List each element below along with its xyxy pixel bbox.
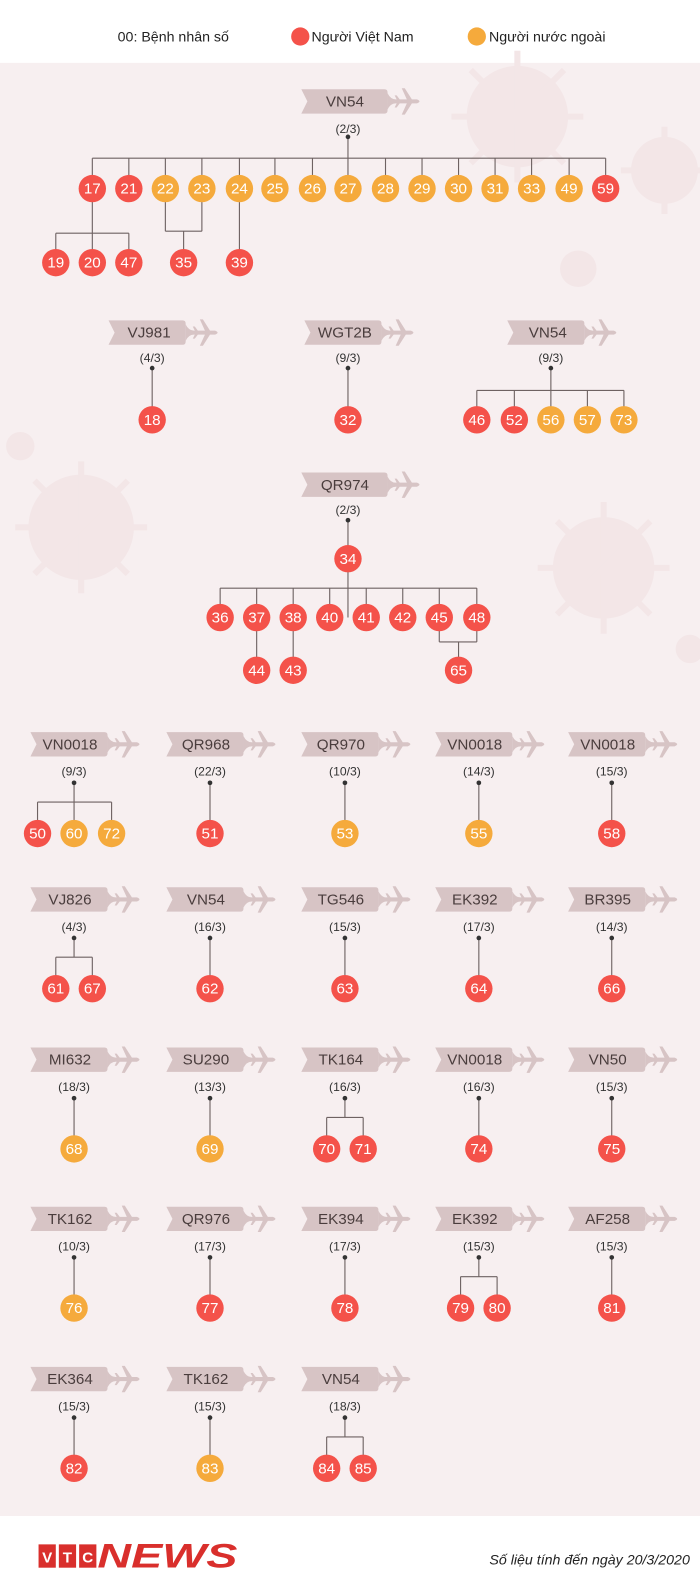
group: TK162 10/3: TK162 — [48, 1211, 92, 1228]
group: QR976 — [166, 1206, 275, 1322]
group: QR974: 38 — [285, 610, 302, 627]
group: VJ826: 67 — [84, 981, 101, 998]
logo: VTC NEWS: C — [82, 1550, 93, 1567]
group: VJ981: (4/3) — [140, 351, 165, 365]
group: SU290 — [166, 1046, 275, 1163]
group: VN0018 14/3: (14/3) — [463, 765, 495, 779]
patients: 19 — [47, 255, 64, 272]
header background — [0, 0, 700, 63]
group: VN0018 15/3: 58 — [603, 826, 620, 843]
group: EK392 17/3: 64 — [470, 981, 488, 998]
group: VN54 18/3: (18/3) — [329, 1400, 361, 1414]
connectors — [56, 137, 606, 263]
group: EK392 15/3: EK392 — [452, 1211, 498, 1228]
patients: 30 — [450, 181, 467, 198]
group: VN54 9/3: 52 — [506, 412, 523, 429]
group: VN54 9/3: 46 — [468, 412, 485, 429]
group: TK162 15/3 — [166, 1366, 275, 1482]
group: TK164: 70 — [318, 1141, 335, 1158]
group: VN54 2/3 — [42, 88, 619, 276]
group: MI632: MI632 — [49, 1052, 91, 1069]
patients: 47 — [120, 255, 137, 272]
group: TK162 10/3 — [30, 1206, 139, 1322]
group: MI632: 68 — [66, 1141, 83, 1158]
group: VN0018 14/3: VN0018 — [447, 736, 502, 753]
group: WGT2B: 32 — [340, 412, 356, 429]
group: EK392 17/3: EK392 — [452, 892, 498, 909]
group: VN54 18/3 — [301, 1366, 410, 1482]
group: QR976: 77 — [202, 1300, 218, 1317]
group: QR974: 41 — [358, 610, 375, 627]
patients: 20 — [84, 255, 101, 272]
legend: Người nước ngoài — [489, 30, 605, 46]
group: VN54 9/3: (9/3) — [538, 351, 563, 365]
group: EK394 — [301, 1206, 410, 1322]
group: EK392 17/3: (17/3) — [463, 920, 495, 934]
group: TK162 10/3: 76 — [66, 1300, 83, 1317]
patients: 22 — [157, 181, 174, 198]
group: EK394: (17/3) — [329, 1239, 361, 1253]
group: AF258: (15/3) — [596, 1239, 628, 1253]
decorative viruses — [6, 51, 700, 663]
group: QR968: (22/3) — [194, 765, 226, 779]
group: QR974: 45 — [431, 610, 448, 627]
group: VN0018 9/3: 72 — [103, 826, 120, 843]
group: QR970 — [301, 731, 410, 847]
group: VN54 9/3: VN54 — [529, 325, 567, 342]
group: VN0018 16/3: VN0018 — [447, 1052, 502, 1069]
group: MI632: (18/3) — [58, 1080, 90, 1094]
row A — [24, 731, 677, 847]
group: VN0018 14/3: 55 — [470, 826, 487, 843]
group: QR976: (17/3) — [194, 1239, 226, 1253]
group: VJ981 — [109, 319, 218, 433]
group: QR974: 34 — [340, 551, 357, 568]
group: VN0018 9/3: 50 — [29, 826, 46, 843]
logo: VTC NEWS: V — [42, 1550, 53, 1567]
group: BR395: BR395 — [584, 892, 631, 909]
group: TK164: (16/3) — [329, 1080, 361, 1094]
group: VJ981: VJ981 — [128, 325, 171, 342]
group: VN0018 9/3: 60 — [66, 826, 83, 843]
group: WGT2B: WGT2B — [318, 325, 372, 342]
patients: 31 — [487, 181, 504, 198]
group: EK394: 78 — [336, 1300, 353, 1317]
group: SU290: 69 — [202, 1141, 218, 1158]
group: EK364: EK364 — [47, 1371, 93, 1388]
group: VN54 9/3: 73 — [615, 412, 632, 429]
group: QR974: 36 — [212, 610, 229, 627]
date: (2/3) — [335, 122, 360, 136]
group: TG546: TG546 — [318, 892, 364, 909]
group: TK162 15/3: (15/3) — [194, 1400, 226, 1414]
row E — [30, 1366, 410, 1482]
legend: Người Việt Nam — [311, 30, 414, 46]
group: TK164: TK164 — [318, 1052, 364, 1069]
patients: 59 — [597, 181, 614, 198]
group: QR970: QR970 — [317, 736, 365, 753]
group: VN54 9/3: 57 — [579, 412, 596, 429]
patients: 23 — [193, 181, 210, 198]
group: QR974: 44 — [248, 662, 266, 679]
group: VN50: 75 — [603, 1141, 620, 1158]
group: QR974: 42 — [394, 610, 411, 627]
group: EK364: 82 — [66, 1460, 83, 1477]
group: SU290: (13/3) — [194, 1080, 226, 1094]
group: QR974: 37 — [248, 610, 265, 627]
group: VN54 9/3: 56 — [542, 412, 559, 429]
group: EK392 15/3: 79 — [452, 1300, 469, 1317]
group: VN0018 16/3: (16/3) — [463, 1080, 495, 1094]
group: QR974 — [206, 472, 491, 684]
group: VJ826: 61 — [47, 981, 64, 998]
group: TK164 — [301, 1046, 410, 1163]
group: AF258: AF258 — [585, 1211, 630, 1228]
group: WGT2B: (9/3) — [335, 351, 360, 365]
group: QR970: 53 — [336, 826, 353, 843]
group: QR976: QR976 — [182, 1211, 230, 1228]
group: TK162 10/3: (10/3) — [58, 1239, 90, 1253]
tag: VN54: VN54 — [326, 93, 364, 110]
group: TG546: 63 — [336, 981, 353, 998]
group: QR970: (10/3) — [329, 765, 361, 779]
group: EK364 — [30, 1366, 139, 1482]
group: VN54 18/3: 84 — [318, 1460, 336, 1477]
group: QR974: 40 — [321, 610, 338, 627]
group: TK164: 71 — [355, 1141, 372, 1158]
group: VN50: VN50 — [589, 1052, 627, 1069]
group: MI632 — [30, 1046, 139, 1163]
group: VN54 16/3: 62 — [202, 981, 218, 998]
group: SU290: SU290 — [183, 1052, 229, 1069]
group: EK392 15/3: (15/3) — [463, 1239, 495, 1253]
patients: 24 — [231, 181, 248, 198]
group: WGT2B — [304, 319, 413, 433]
group: EK392 17/3 — [435, 886, 544, 1002]
group: VN0018 16/3 — [435, 1046, 544, 1163]
group: AF258 — [568, 1206, 677, 1322]
group: EK392 15/3: 80 — [489, 1300, 506, 1317]
patients: 49 — [561, 181, 578, 198]
group: EK394: EK394 — [318, 1211, 364, 1228]
group: VN0018 9/3: VN0018 — [43, 736, 97, 753]
legend — [118, 27, 605, 46]
group: VN54 16/3 — [166, 886, 275, 1002]
group: BR395: 66 — [603, 981, 620, 998]
footer note: Số liệu tính đến ngày 20/3/2020 — [489, 1553, 690, 1569]
group: VN54 16/3: VN54 — [187, 892, 226, 909]
group: QR974: 43 — [285, 662, 302, 679]
legend: 00: Bệnh nhân số — [118, 30, 229, 46]
patients: 21 — [120, 181, 137, 198]
group: BR395 — [568, 886, 677, 1002]
tag: VN54 — [301, 88, 419, 115]
group: VN0018 9/3: (9/3) — [62, 765, 87, 779]
group: VN54 18/3: 85 — [355, 1460, 372, 1477]
group: VN0018 15/3: (15/3) — [596, 765, 628, 779]
group: QR974: 65 — [450, 662, 467, 679]
group: VN0018 9/3 — [24, 731, 139, 847]
group: TK162 15/3: 83 — [202, 1460, 218, 1477]
group: QR968: QR968 — [182, 736, 230, 753]
logo: VTC NEWS: NEWS — [97, 1538, 237, 1576]
group: QR968 — [166, 731, 275, 847]
group: VJ826: VJ826 — [48, 892, 92, 909]
group: EK392 15/3 — [435, 1206, 544, 1322]
group: QR974: QR974 — [321, 477, 370, 494]
patients: 35 — [175, 255, 192, 272]
group: TG546: (15/3) — [329, 920, 361, 934]
row C — [30, 1046, 677, 1163]
patients: 27 — [340, 181, 356, 198]
patients: 33 — [523, 181, 540, 198]
group: TG546 — [301, 886, 410, 1002]
patients — [42, 175, 619, 276]
group: VN0018 16/3: 74 — [470, 1141, 488, 1158]
patients: 25 — [266, 181, 283, 198]
group: VN0018 14/3 — [435, 731, 544, 847]
row B — [30, 886, 677, 1002]
logo: VTC NEWS: T — [63, 1550, 73, 1567]
group: VN0018 15/3 — [568, 731, 677, 847]
group: AF258: 81 — [603, 1300, 620, 1317]
group: VN0018 15/3: VN0018 — [580, 736, 635, 753]
group: VN54 18/3: VN54 — [322, 1371, 360, 1388]
group: VN54 16/3: (16/3) — [194, 920, 226, 934]
patients: 28 — [377, 181, 394, 198]
group: VN50 — [568, 1046, 677, 1163]
patients: 29 — [414, 181, 430, 198]
group: VJ981: 18 — [144, 412, 161, 429]
group: QR974: (2/3) — [335, 503, 360, 517]
row D — [30, 1206, 677, 1322]
logo: VTC NEWS — [39, 1538, 237, 1576]
group: BR395: (14/3) — [596, 920, 628, 934]
group: VJ826 — [30, 886, 139, 1002]
group: VN50: (15/3) — [596, 1080, 628, 1094]
patients: 26 — [304, 181, 321, 198]
patients: 39 — [231, 255, 248, 272]
patients: 17 — [84, 181, 101, 198]
group: VJ826: (4/3) — [62, 920, 87, 934]
group: VN54 9/3 — [463, 319, 638, 433]
group: QR974: 48 — [468, 610, 485, 627]
group: TK162 15/3: TK162 — [184, 1371, 228, 1388]
group: EK364: (15/3) — [58, 1400, 90, 1414]
group: QR968: 51 — [202, 826, 218, 843]
